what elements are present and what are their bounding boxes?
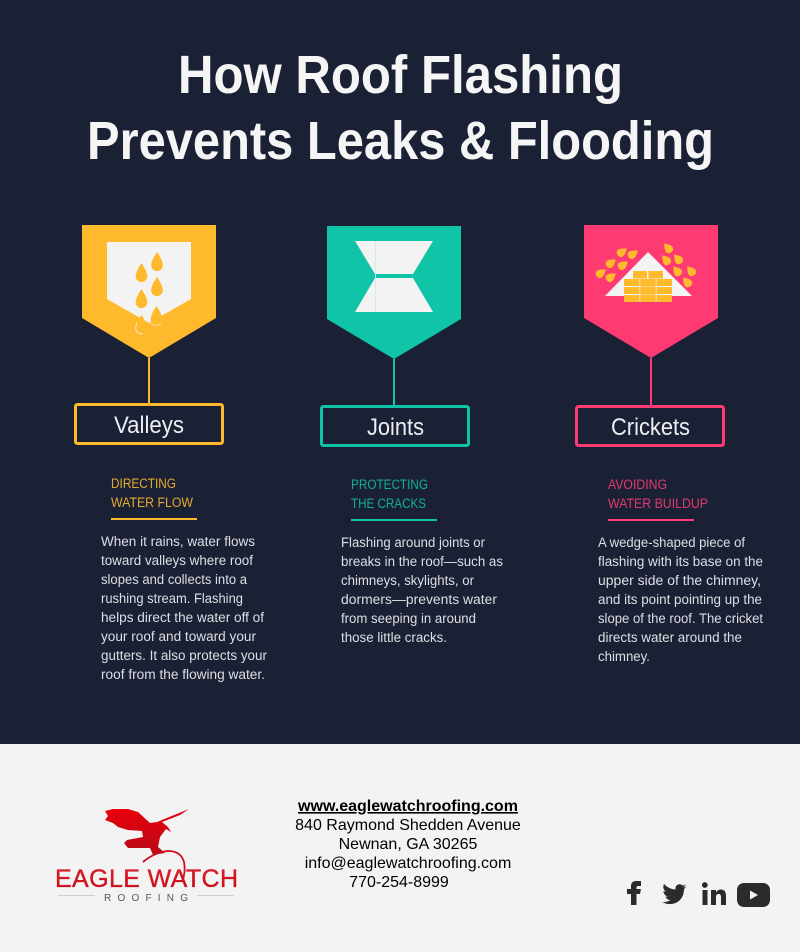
text block: and its point pointing up the bbox=[598, 592, 762, 607]
text block: rushing stream. Flashing bbox=[101, 591, 243, 606]
icon: youtube bbox=[737, 883, 770, 907]
panel: joints bbox=[322, 226, 503, 645]
text block: breaks in the roof—such as bbox=[341, 554, 503, 569]
text block: helps direct the water off of bbox=[101, 610, 264, 625]
title bbox=[87, 45, 714, 171]
subheading bbox=[111, 476, 197, 520]
text block: roof from the flowing water. bbox=[101, 667, 265, 682]
logo: Eagle Watch Roofing: EAGLE WATCH bbox=[55, 865, 238, 893]
icon: twitter bbox=[662, 884, 686, 904]
panel: valleys bbox=[76, 225, 267, 682]
label: Valleys: Valleys bbox=[114, 412, 184, 439]
subheading: AVOIDING bbox=[608, 477, 667, 492]
text block: your roof and toward your bbox=[101, 629, 256, 644]
logo: Eagle Watch Roofing bbox=[55, 809, 238, 904]
contact details: www.eaglewatchroofing.com bbox=[297, 798, 518, 815]
title: Prevents Leaks & Flooding bbox=[87, 111, 714, 171]
label: Joints bbox=[322, 406, 468, 446]
text block: Flashing around joints or bbox=[341, 535, 485, 550]
text block bbox=[341, 535, 503, 645]
text block: slopes and collects into a bbox=[101, 572, 247, 587]
subheading bbox=[351, 477, 437, 521]
subheading: PROTECTING bbox=[351, 477, 428, 492]
text block: those little cracks. bbox=[341, 630, 447, 645]
icon: joints shield bbox=[327, 226, 461, 359]
text block: upper side of the chimney, bbox=[598, 573, 761, 588]
subheading: WATER FLOW bbox=[111, 495, 193, 510]
text block: flashing with its base on the bbox=[598, 554, 763, 569]
text block: toward valleys where roof bbox=[101, 553, 253, 568]
text block: A wedge-shaped piece of bbox=[598, 535, 745, 550]
subheading bbox=[608, 477, 708, 521]
contact details bbox=[295, 798, 521, 891]
connector bbox=[650, 358, 652, 406]
text block: chimney. bbox=[598, 649, 650, 664]
connector bbox=[148, 358, 150, 404]
panel: crickets bbox=[576, 225, 763, 664]
logo: Eagle Watch Roofing: ROOFING bbox=[104, 893, 188, 904]
icon: linkedin bbox=[702, 882, 726, 905]
subheading: WATER BUILDUP bbox=[608, 496, 708, 511]
label: Crickets bbox=[576, 406, 724, 446]
label: Crickets: Crickets bbox=[611, 414, 690, 441]
text block: chimneys, skylights, or bbox=[341, 573, 474, 588]
subheading: DIRECTING bbox=[111, 476, 176, 491]
icon: facebook bbox=[627, 881, 641, 905]
text block: gutters. It also protects your bbox=[101, 648, 267, 663]
contact details: 770-254-8999 bbox=[349, 874, 449, 891]
text block: dormers—prevents water bbox=[341, 592, 498, 607]
text block: from seeping in around bbox=[341, 611, 476, 626]
text block: slope of the roof. The cricket bbox=[598, 611, 763, 626]
subheading: THE CRACKS bbox=[351, 496, 426, 511]
text block bbox=[598, 535, 763, 664]
icon: valleys shield bbox=[82, 225, 216, 358]
contact details: Newnan, GA 30265 bbox=[339, 836, 477, 853]
footer panel bbox=[0, 744, 800, 952]
icon: crickets shield bbox=[584, 225, 718, 358]
text block: When it rains, water flows bbox=[101, 534, 255, 549]
contact details: info@eaglewatchroofing.com bbox=[305, 855, 511, 872]
text block bbox=[101, 534, 267, 682]
title: How Roof Flashing bbox=[178, 45, 623, 105]
connector bbox=[393, 359, 395, 406]
text block: directs water around the bbox=[598, 630, 742, 645]
contact details: 840 Raymond Shedden Avenue bbox=[295, 817, 521, 834]
label: Valleys bbox=[76, 404, 222, 444]
label: Joints: Joints bbox=[367, 414, 424, 441]
